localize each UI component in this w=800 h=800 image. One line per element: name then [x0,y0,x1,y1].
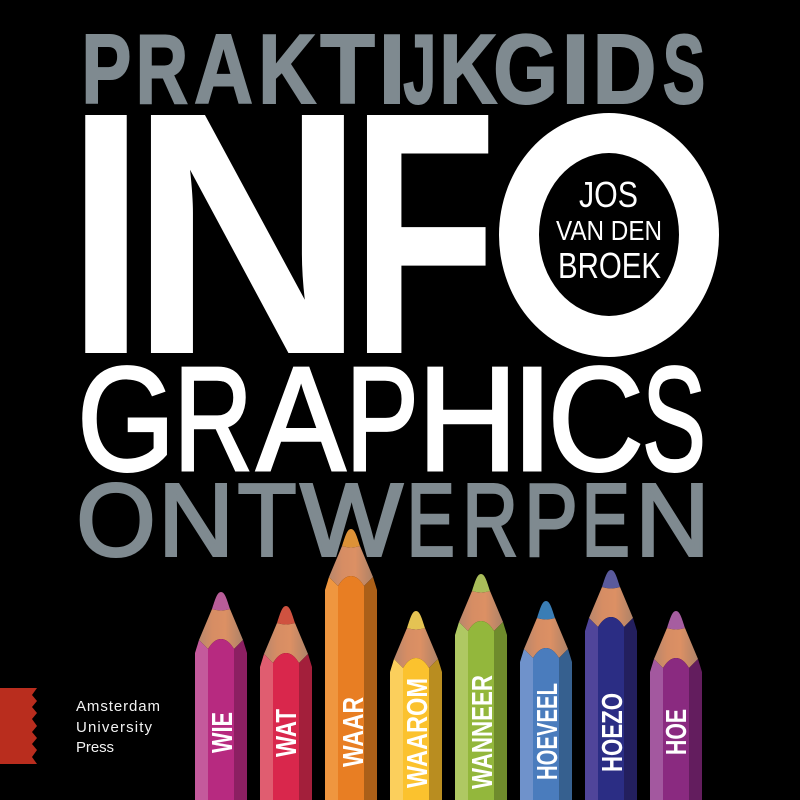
title line: GRAPHICS [77,337,706,502]
title line: GRAPHICS: S [642,337,706,502]
title line: ONTWERPEN: E [407,462,455,578]
title line: GRAPHICS: G [77,337,175,502]
icon: publisher logo serrated red block [0,688,37,764]
title line: PRAKTIJKGIDS: I [561,14,590,124]
title line: GRAPHICS: P [346,337,419,502]
pencil: HOEVEEL: HOEVEEL [532,683,564,780]
title line: ONTWERPEN: O [76,462,156,578]
title line: PRAKTIJKGIDS: R [136,14,188,124]
pencil: WIE [195,592,247,800]
publisher name: Amsterdam [76,698,160,715]
publisher name: University [76,719,152,736]
pencil: HOEZO: HOEZO [597,693,629,772]
pencil: WANNEER: WANNEER [467,675,499,789]
title line: GRAPHICS: H [417,337,518,502]
pencil: WAT [260,606,312,800]
title line: ONTWERPEN [76,462,710,578]
title line: GRAPHICS: I [510,337,555,502]
title line: ONTWERPEN: E [582,462,630,578]
pencil: WAAROM: WAAROM [402,678,434,788]
title line: GRAPHICS: A [256,337,346,502]
title line: PRAKTIJKGIDS: T [320,14,375,124]
author name inside the O: VAN DEN [556,215,662,246]
pencil: WAAROM [390,611,442,800]
pencil: WANNEER [455,574,507,800]
title line: ONTWERPEN: R [462,462,518,578]
title line: INFO [66,41,719,427]
pencil: HOE: HOE [661,709,693,755]
title line: PRAKTIJKGIDS: G [493,14,558,124]
title line: ONTWERPEN: N [158,462,234,578]
title line: PRAKTIJKGIDS: P [82,14,131,124]
pencil: WAAR: WAAR [338,697,370,767]
title line: ONTWERPEN: P [524,462,578,578]
author name inside the O: BROEK [558,245,661,286]
pencil: WIE: WIE [207,712,239,753]
title line: GRAPHICS: R [174,337,253,502]
title line: PRAKTIJKGIDS: I [378,14,406,124]
title line: PRAKTIJKGIDS: S [663,14,705,124]
pencil: HOE [650,611,702,800]
author name inside the O [556,174,662,286]
pencil: WAT: WAT [271,709,303,757]
title line: INFO: N [129,41,366,427]
title line: ONTWERPEN: N [635,462,710,578]
title line: PRAKTIJKGIDS: K [439,14,497,124]
title line: PRAKTIJKGIDS: D [592,14,656,124]
title line: PRAKTIJKGIDS: J [403,14,436,124]
title line: ONTWERPEN: T [238,462,296,578]
pencil: HOEZO [585,570,637,800]
pencil: WAAR [325,529,377,800]
title line: PRAKTIJKGIDS: K [258,14,316,124]
author name inside the O: JOS [579,174,638,215]
title line: INFO: F [351,41,497,427]
publisher name [76,698,160,756]
pencil: HOEVEEL [520,601,572,800]
title line: PRAKTIJKGIDS: A [194,14,253,124]
publisher name: Press [76,739,114,756]
title line: INFO: O [500,60,718,418]
title line: INFO: I [66,41,146,427]
title line: PRAKTIJKGIDS [82,14,705,124]
title line: ONTWERPEN: W [300,462,402,578]
title line: GRAPHICS: C [548,337,644,502]
